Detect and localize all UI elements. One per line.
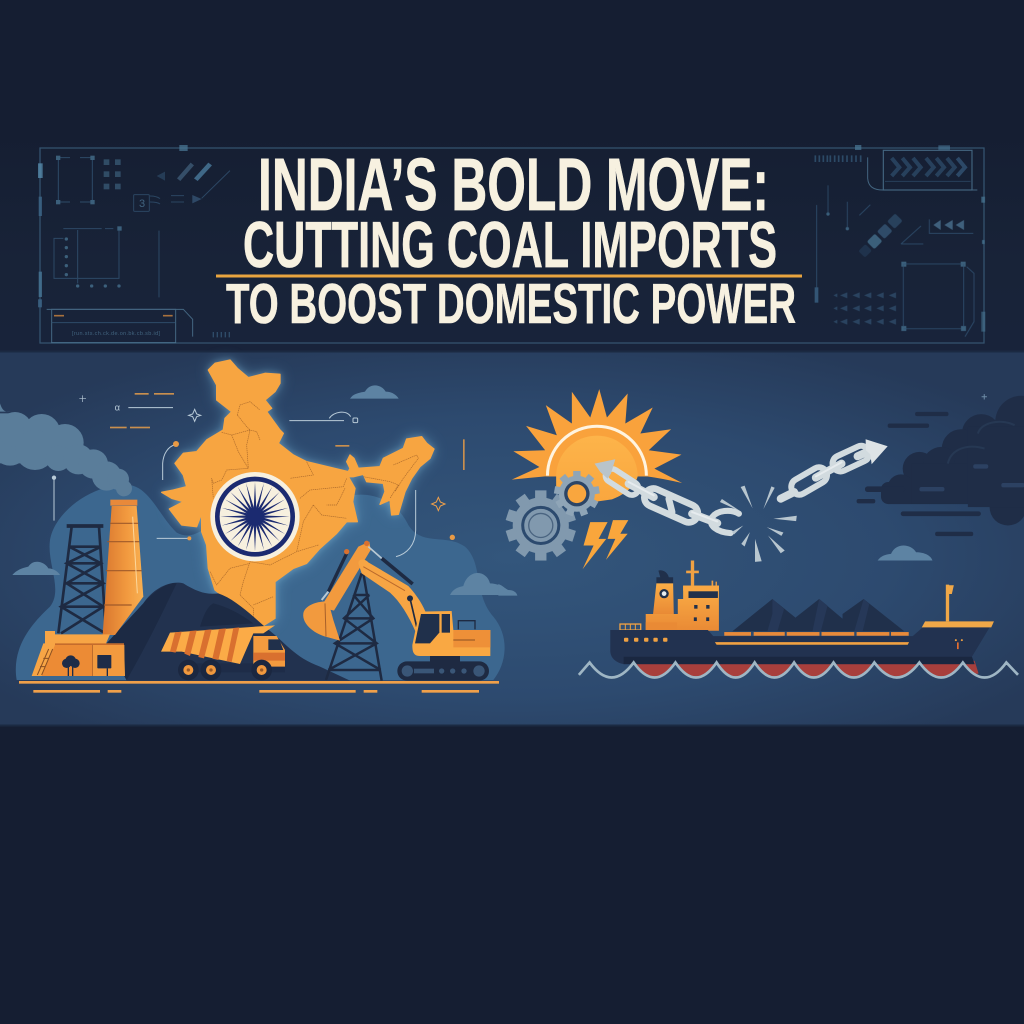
coal pile — [107, 583, 350, 681]
lightning bolts — [583, 520, 628, 569]
dump truck — [161, 625, 285, 680]
break burst sparks — [720, 486, 797, 562]
orange accent dashes — [110, 393, 465, 540]
excavator — [303, 541, 490, 681]
chain arrowhead: left — [595, 459, 615, 479]
cargo ship — [579, 561, 1018, 678]
smokestack — [103, 500, 143, 635]
chain arrowhead: right — [866, 439, 888, 464]
oil derrick: left — [58, 526, 106, 633]
small clouds — [12, 385, 512, 595]
decorative callout marks — [52, 395, 445, 557]
tech label: small code line: [run.sts.ch.ck.de.on.bk.cb.sb.id] — [72, 331, 160, 337]
deck plates — [724, 632, 909, 636]
tech frame: circuit outline — [40, 148, 984, 343]
scene: domestic coal India (left) — [0, 360, 512, 693]
state borders — [210, 402, 418, 617]
tech label: small numeral: 3 — [139, 198, 145, 210]
scene: imports broken chain (right) — [498, 389, 1024, 678]
coal cargo heaps — [732, 599, 904, 631]
broken chain: left segment — [603, 466, 739, 533]
hull — [610, 627, 990, 664]
superstructure — [646, 586, 719, 631]
small clouds — [498, 546, 932, 596]
title divider — [216, 274, 802, 278]
broken chain: right segment — [781, 443, 874, 499]
title: line two: CUTTING COAL IMPORTS — [243, 208, 777, 281]
callout label: α — [115, 403, 121, 413]
tech details: top left — [38, 145, 230, 343]
small star — [982, 394, 987, 399]
waves — [579, 662, 1018, 678]
red hull bottom — [634, 661, 979, 678]
gears — [506, 471, 600, 561]
sun — [512, 389, 682, 504]
road dashes — [33, 690, 479, 693]
title: line one: INDIA’S BOLD MOVE: — [258, 143, 769, 226]
bow deck and mast — [922, 621, 994, 627]
power plant building — [32, 631, 125, 676]
band edge shadow — [0, 352, 1024, 726]
tech details: top right — [815, 145, 985, 337]
smoke cloud — [0, 403, 132, 496]
Ashoka chakra emblem — [210, 472, 300, 561]
ground line — [19, 681, 499, 684]
panel: title banner — [0, 130, 1024, 351]
blue hill backdrop — [16, 485, 505, 680]
funnel — [653, 583, 674, 614]
dark storm cloud — [857, 396, 1024, 536]
portholes — [624, 638, 667, 642]
India map with glow — [162, 360, 434, 627]
anchor mark — [955, 642, 960, 649]
panel: illustration band — [0, 351, 1024, 726]
oil derrick: right — [326, 573, 382, 681]
